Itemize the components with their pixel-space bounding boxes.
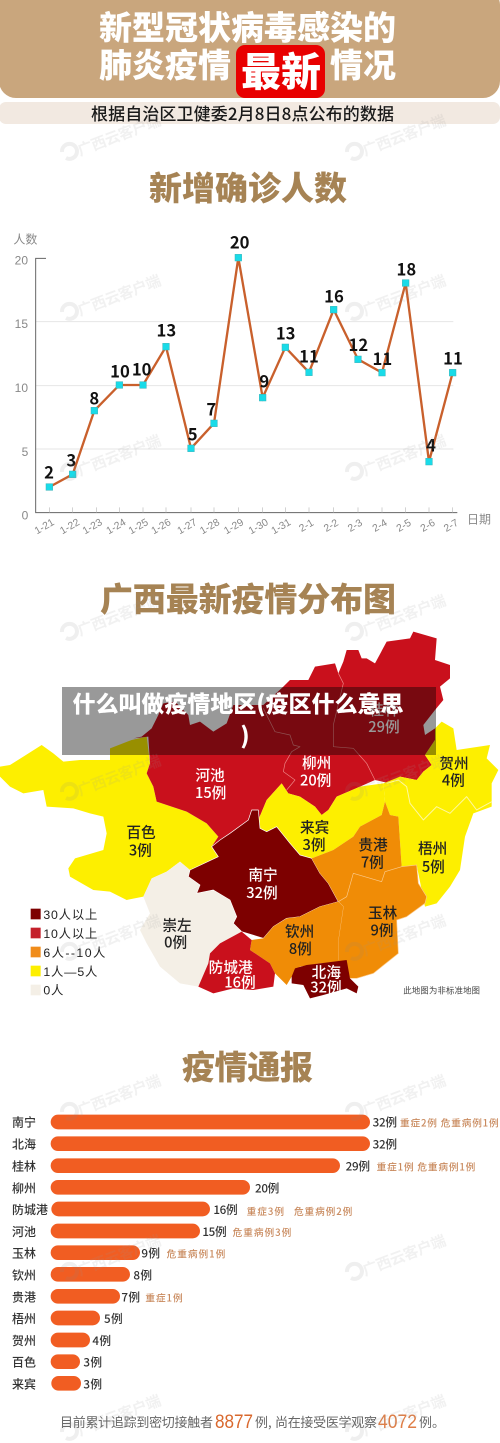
x axis labels: 2-6: [419, 518, 438, 535]
city names: 玉林: [12, 1245, 36, 1262]
map labels: 9例: [370, 919, 394, 940]
legend: 1人—5人: [43, 965, 97, 979]
data values: 18: [397, 256, 416, 280]
map labels: 南宁: [248, 864, 278, 885]
x axis labels: [33, 510, 491, 537]
map labels: 河池: [195, 765, 225, 786]
data line: [49, 258, 453, 487]
data markers: [46, 254, 456, 490]
region: Fangchenggang: [198, 932, 275, 993]
data values: 7: [206, 397, 216, 421]
data values: 11: [373, 346, 392, 370]
data values: 11: [299, 343, 319, 367]
data values: 8: [89, 386, 99, 410]
title line 2 right: 情况: [330, 39, 396, 87]
summary sentence: 4072: [378, 1412, 417, 1433]
city names: 柳州: [12, 1179, 36, 1196]
map labels: 防城港: [209, 957, 253, 978]
subtitle strip: [0, 100, 500, 125]
grid lines and axes: [36, 258, 457, 513]
case counts: 3例: [83, 1375, 102, 1392]
line chart: [13, 230, 491, 537]
city names: 贺州: [12, 1332, 36, 1349]
x axis labels: 日期: [467, 510, 491, 527]
severity notes: 重症1例: [145, 1290, 183, 1304]
map labels: 4例: [442, 769, 465, 790]
severity notes: 危重病例3例: [233, 1225, 291, 1239]
map labels: [126, 699, 469, 998]
data values: 10: [132, 357, 152, 381]
data values: 20: [230, 230, 250, 254]
city names: 防城港: [12, 1201, 48, 1218]
subtitle strip: 根据自治区卫健委2月8日8点公布的数据: [91, 100, 394, 125]
x axis labels: 2-2: [322, 518, 341, 535]
map labels: 桂林: [369, 699, 399, 720]
severity notes: 重症3例: [247, 1204, 284, 1218]
x axis labels: 1-26: [150, 517, 173, 537]
y axis labels: [13, 230, 37, 522]
x axis labels: 1-21: [33, 517, 57, 537]
legend: 6人--10人: [43, 946, 105, 960]
city names: 贵港: [12, 1288, 36, 1305]
map labels: 贵港: [358, 834, 388, 855]
y axis labels: 15: [15, 317, 28, 331]
map labels: 32例: [246, 882, 278, 903]
case counts: [83, 1114, 397, 1392]
map labels: 29例: [368, 716, 400, 737]
x axis labels: 1-25: [127, 517, 151, 537]
data values: [44, 230, 463, 484]
severity notes: 重症2例 危重病例1例: [400, 1116, 499, 1130]
city names: 南宁: [12, 1114, 36, 1131]
data values: 4: [426, 433, 436, 457]
data values: 16: [324, 283, 344, 307]
summary sentence: 例。: [419, 1412, 445, 1431]
city names: 河池: [12, 1223, 36, 1240]
data values: 13: [157, 317, 176, 341]
map labels: 3例: [129, 839, 152, 860]
x axis labels: 2-3: [346, 518, 365, 535]
summary sentence: 8877: [215, 1412, 253, 1433]
region: Baise: [0, 737, 218, 900]
map of Guangxi: [0, 632, 498, 998]
legend: 0人: [43, 983, 63, 997]
x axis labels: 2-7: [442, 518, 461, 535]
x axis labels: 1-29: [222, 517, 246, 537]
x axis labels: 2-5: [395, 518, 414, 535]
heading: distribution map: 广西最新疫情分布图: [100, 573, 396, 621]
region borders: Hechi, Liuzhou, Guilin: [263, 673, 375, 790]
map labels: 梧州: [418, 837, 447, 858]
map note: 此地图为非标准地图: [403, 984, 480, 996]
overlay title caption: ): [240, 717, 250, 751]
y axis labels: 5: [22, 445, 29, 459]
y axis labels: 20: [15, 254, 28, 268]
region: Hezhou, Wuzhou: [383, 722, 498, 907]
legend: 10人以上: [43, 927, 97, 941]
y axis labels: 0: [22, 508, 29, 522]
map labels: 20例: [300, 769, 331, 790]
data values: 12: [349, 332, 368, 356]
data values: 2: [44, 460, 54, 484]
x axis labels: 2-1: [298, 518, 316, 535]
map labels: 8例: [289, 938, 312, 959]
map labels: 来宾: [300, 817, 329, 838]
city names: 桂林: [12, 1157, 36, 1174]
city names: [12, 1114, 48, 1392]
watermarks: [62, 110, 449, 1441]
region: Beihai: [292, 960, 358, 998]
title line 2 left: 肺炎疫情: [99, 39, 231, 87]
city names: 北海: [12, 1136, 36, 1153]
map labels: 5例: [422, 856, 445, 877]
legend: 30人以上: [43, 908, 97, 922]
x axis labels: 1-22: [58, 517, 82, 537]
case counts: 16例: [213, 1201, 238, 1218]
map labels: 16例: [224, 971, 256, 992]
region: Hechi, Liuzhou, Guilin: [133, 632, 450, 847]
case counts: 8例: [133, 1266, 152, 1283]
map labels: 北海: [312, 961, 341, 982]
map labels: 柳州: [302, 752, 331, 773]
case counts: 5例: [104, 1310, 123, 1327]
title line 1: 新型冠状病毒感染的: [99, 2, 396, 50]
summary sentence: [60, 1412, 445, 1433]
severity notes: 危重病例2例: [294, 1204, 352, 1218]
region: Guigang: [312, 802, 402, 902]
data values: 11: [443, 346, 463, 370]
case counts: 32例: [373, 1136, 397, 1153]
map labels: 7例: [361, 851, 384, 872]
case counts: 32例: [373, 1114, 397, 1131]
case counts: 4例: [92, 1332, 111, 1349]
map labels: 崇左: [162, 915, 192, 936]
x axis labels: 1-23: [81, 517, 105, 537]
city names: 百色: [12, 1354, 36, 1371]
bars: [51, 1115, 370, 1391]
header banner: [0, 0, 500, 98]
bar chart by city: [12, 1114, 499, 1392]
x axis labels: 1-27: [176, 517, 199, 537]
data values: 9: [259, 369, 269, 393]
summary sentence: 尚在接受医学观察: [275, 1412, 377, 1431]
data values: 3: [66, 447, 76, 471]
region: Nanning: [188, 810, 338, 938]
severity notes: 重症1例 危重病例1例: [377, 1159, 475, 1173]
city names: 钦州: [12, 1266, 36, 1283]
region border: Hezhou, Wuzhou: [387, 780, 492, 820]
case counts: 3例: [83, 1354, 102, 1371]
city names: 梧州: [12, 1310, 36, 1327]
city names: 来宾: [12, 1375, 36, 1392]
data values: 10: [110, 359, 130, 383]
data values: 5: [188, 422, 198, 446]
y axis labels: 10: [15, 381, 28, 395]
map labels: 0例: [164, 931, 187, 952]
case counts: 9例: [141, 1245, 160, 1262]
case counts: 20例: [255, 1179, 279, 1196]
region: Yulin: [338, 865, 427, 978]
case counts: 15例: [202, 1223, 227, 1240]
map labels: 32例: [310, 977, 342, 998]
y axis labels: 人数: [13, 230, 37, 247]
x axis labels: 2-4: [371, 518, 390, 535]
badge: latest: 最新: [241, 40, 321, 98]
severity notes: [145, 1116, 499, 1304]
data values: 13: [276, 320, 295, 344]
region: Qinzhou: [250, 902, 347, 985]
legend: [31, 908, 105, 997]
overlay title caption: [62, 685, 436, 755]
map labels: 玉林: [368, 902, 398, 923]
x axis labels: 1-30: [247, 517, 271, 537]
heading: report: 疫情通报: [182, 1041, 313, 1089]
x axis labels: 1-28: [198, 517, 222, 537]
map labels: 15例: [195, 782, 226, 803]
severity notes: 危重病例1例: [167, 1246, 225, 1260]
map labels: 钦州: [285, 921, 314, 942]
map labels: 百色: [126, 821, 156, 842]
summary sentence: 目前累计追踪到密切接触者: [60, 1412, 213, 1431]
region: Chongzuo: [140, 862, 242, 987]
summary sentence: 例,: [255, 1412, 272, 1431]
region: Laibin: [258, 783, 385, 858]
x axis labels: 1-31: [270, 517, 293, 537]
case counts: 7例: [121, 1288, 140, 1305]
heading: new confirmed: 新增确诊人数: [149, 162, 347, 210]
x axis labels: 1-24: [105, 517, 128, 537]
map labels: 贺州: [439, 752, 469, 773]
overlay title caption: 什么叫做疫情地区(疫区什么意思: [72, 685, 404, 719]
map labels: 3例: [302, 834, 326, 855]
case counts: 29例: [346, 1157, 370, 1174]
